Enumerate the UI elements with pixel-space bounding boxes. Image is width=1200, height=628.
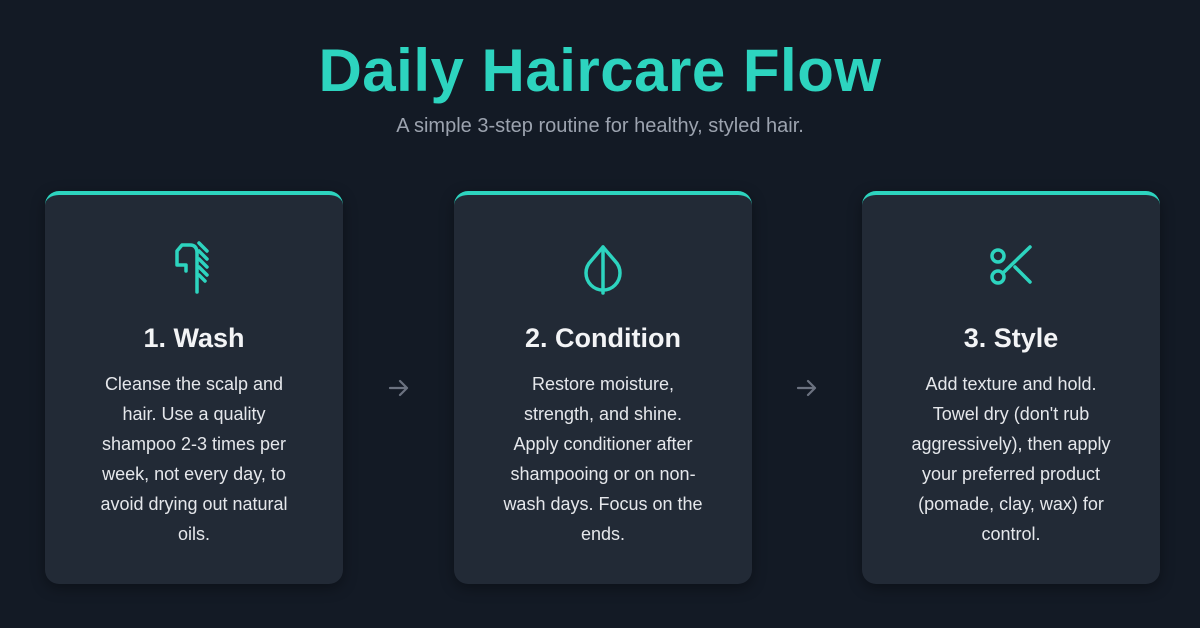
panel: wash: [45, 191, 343, 584]
title: Daily Haircare Flow: [318, 37, 882, 104]
arrow: [797, 380, 816, 396]
arrow: [389, 380, 408, 396]
heading: 1. Wash: [143, 323, 245, 353]
subtitle: A simple 3-step routine for healthy, styled hair.: [396, 115, 804, 137]
panel: style: [862, 191, 1160, 584]
text: Add texture and hold. Towel dry (don't rub aggressively), then apply your preferred product (pomade, clay, wax) for control.: [911, 374, 1111, 544]
icon: scissors: [990, 245, 1032, 285]
text: Cleanse the scalp and hair. Use a quality shampoo 2-3 times per week, not every day, to avoid drying out natural oils.: [100, 374, 288, 544]
icon: drop: [584, 245, 622, 295]
panel: condition: [454, 191, 752, 584]
heading: 2. Condition: [525, 323, 681, 353]
heading: 3. Style: [964, 323, 1058, 353]
icon: shower: [175, 241, 209, 294]
text: Restore moisture, strength, and shine. Apply conditioner after shampooing or on non-wash days. Focus on the ends.: [503, 374, 703, 544]
